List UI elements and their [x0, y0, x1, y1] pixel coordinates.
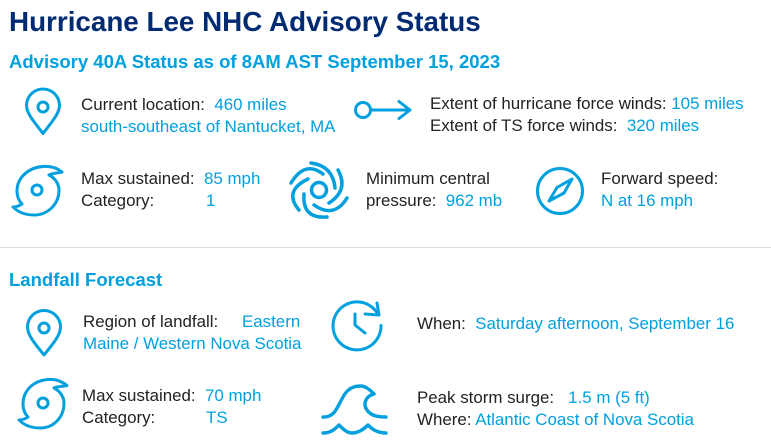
- title: Hurricane Lee NHC Advisory Status: [9, 6, 481, 37]
- region of landfall text: Eastern: [242, 312, 300, 331]
- wind extent text: Extent of TS force winds: 320 miles: [430, 116, 699, 135]
- wind extent text: [430, 94, 744, 135]
- storm surge text: Where: Atlantic Coast of Nova Scotia: [417, 410, 694, 429]
- landfall time text: When: Saturday afternoon, September 16: [417, 314, 734, 333]
- forward speed text: Forward speed:: [601, 169, 718, 188]
- wind extent text: Extent of hurricane force winds: 105 miles: [430, 94, 744, 113]
- landfall max sustained text: Max sustained: 70 mph: [82, 386, 261, 405]
- icon: arrow: [356, 102, 410, 118]
- section heading: landfall forecast: Landfall Forecast: [9, 269, 162, 290]
- forward speed text: [601, 169, 718, 210]
- region of landfall text: Maine / Western Nova Scotia: [83, 334, 301, 353]
- max sustained text: Max sustained: 85 mph: [81, 169, 260, 188]
- icon: hurricane: [19, 379, 67, 428]
- central pressure text: Minimum central: [366, 169, 490, 188]
- landfall max sustained text: TS: [206, 408, 228, 427]
- icon: location pin: [26, 89, 60, 134]
- icon: hurricane: [13, 166, 62, 215]
- section heading: advisory status: Advisory 40A Status as of 8AM AST September 15, 2023: [9, 51, 500, 72]
- icon: storm surge wave: [323, 386, 386, 433]
- max sustained text: [81, 169, 260, 210]
- region of landfall text: [83, 312, 302, 353]
- central pressure text: [366, 169, 502, 210]
- icon: clock: [333, 302, 381, 350]
- max sustained text: Category:: [81, 191, 154, 210]
- max sustained text: 1: [206, 191, 215, 210]
- current location text: Current location: 460 miles: [81, 95, 287, 114]
- current location text: south-southeast of Nantucket, MA: [81, 117, 335, 136]
- icon: location pin: [28, 310, 60, 355]
- storm surge text: [417, 388, 694, 429]
- icon: pressure swirl: [291, 163, 347, 217]
- icon: compass: [538, 168, 582, 214]
- landfall max sustained text: Category:: [82, 408, 155, 427]
- current location text: [81, 95, 336, 136]
- storm surge text: Peak storm surge: 1.5 m (5 ft): [417, 388, 650, 407]
- region of landfall text: Region of landfall:: [83, 312, 218, 331]
- forward speed text: N at 16 mph: [601, 191, 693, 210]
- central pressure text: pressure: 962 mb: [366, 191, 502, 210]
- landfall max sustained text: [82, 386, 261, 427]
